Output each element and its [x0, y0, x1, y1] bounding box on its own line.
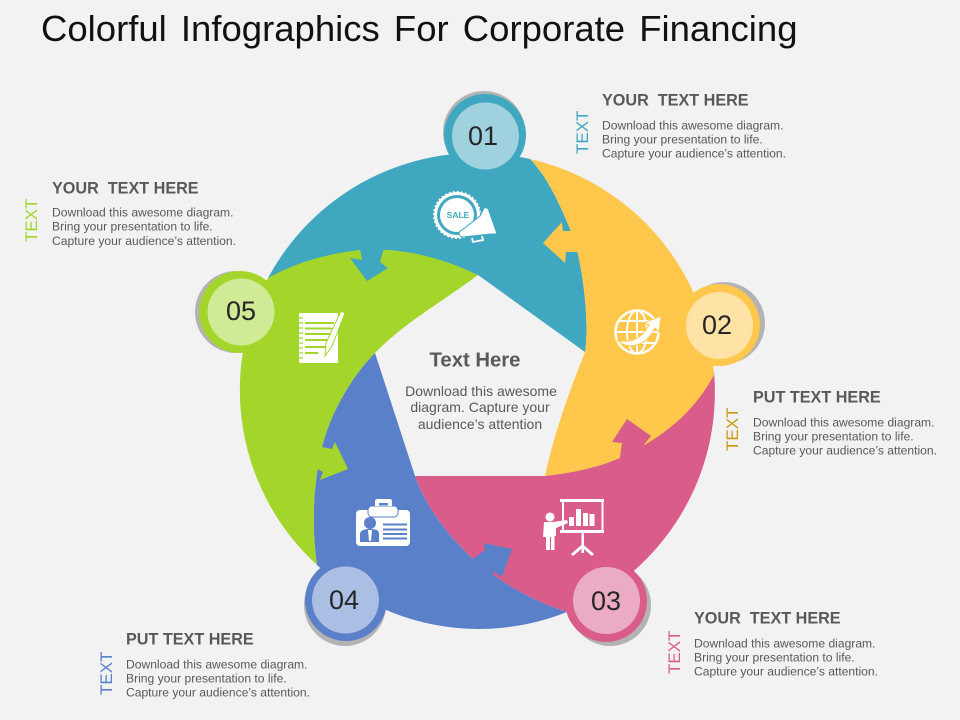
text block 03: Capture your audience’s attention. [694, 664, 878, 678]
segment 05 green [240, 250, 478, 565]
text block 02: Download this awesome diagram. [753, 416, 934, 430]
text block 02 [723, 388, 937, 458]
badge 04: 04 [329, 585, 359, 615]
segment 03 pink [415, 372, 715, 612]
center text: diagram. Capture your [410, 399, 550, 415]
center text: Download this awesome [405, 383, 557, 399]
icon: globe with arrow [616, 310, 661, 354]
badge 01 [443, 91, 526, 176]
text block 05: Capture your audience’s attention. [52, 234, 236, 248]
text block 02: PUT TEXT HERE [753, 388, 881, 406]
arrow: teal into green [350, 248, 388, 281]
arrow: green into blue [312, 442, 348, 480]
icon: ID card [356, 499, 410, 546]
text block 05: Bring your presentation to life. [52, 220, 213, 234]
text block 03: Download this awesome diagram. [694, 636, 876, 650]
badge 05: 05 [226, 296, 256, 326]
text block 04: PUT TEXT HERE [126, 630, 254, 648]
icon: sale badge and megaphone: SALE [447, 210, 470, 220]
text block 05: Download this awesome diagram. [52, 206, 234, 220]
center text: audience’s attention [418, 416, 542, 432]
cycle diagram [240, 153, 715, 629]
segment 04 blue [314, 353, 567, 629]
text block 05: TEXT [22, 199, 41, 242]
text block 05: YOUR TEXT HERE [52, 180, 199, 198]
center text [405, 350, 557, 432]
text block 03 [665, 610, 878, 678]
text block 03: TEXT [665, 631, 684, 674]
text block 04 [97, 630, 310, 700]
badge 02 [678, 282, 765, 366]
badge 03: 03 [591, 586, 621, 616]
icon: presentation board [543, 499, 604, 556]
text block 04: TEXT [97, 652, 116, 695]
text block 01: Capture your audience’s attention. [602, 146, 786, 160]
text block 01 [573, 92, 786, 160]
text block 01: Download this awesome diagram. [602, 118, 784, 132]
text block 05 [22, 180, 236, 248]
badge 05 [195, 271, 281, 353]
icon: notebook and pen [299, 311, 345, 363]
text block 03: YOUR TEXT HERE [694, 610, 841, 628]
text block 04: Capture your audience’s attention. [126, 686, 310, 700]
text block 04: Download this awesome diagram. [126, 658, 308, 672]
segment 01 teal [268, 153, 587, 352]
icon: sale badge and megaphone [434, 192, 497, 242]
text block 02: TEXT [723, 408, 742, 451]
title: Colorful Infographics For Corporate Financing [41, 8, 798, 49]
text block 01: TEXT [573, 111, 592, 154]
arrow: yellow into teal [543, 222, 582, 263]
arrow: blue into pink [470, 543, 512, 577]
badge 04 [304, 559, 387, 646]
text block 03: Bring your presentation to life. [694, 650, 855, 664]
segment 02 yellow [530, 159, 714, 476]
text block 01: Bring your presentation to life. [602, 132, 763, 146]
center text: Text Here [430, 350, 520, 372]
badge 03 [565, 560, 651, 646]
text block 02: Capture your audience’s attention. [753, 444, 937, 458]
arrow: pink into yellow [612, 419, 651, 464]
badge 01: 01 [468, 121, 498, 151]
text block 04: Bring your presentation to life. [126, 672, 287, 686]
text block 01: YOUR TEXT HERE [602, 92, 749, 110]
badge 02: 02 [702, 310, 732, 340]
text block 02: Bring your presentation to life. [753, 430, 914, 444]
